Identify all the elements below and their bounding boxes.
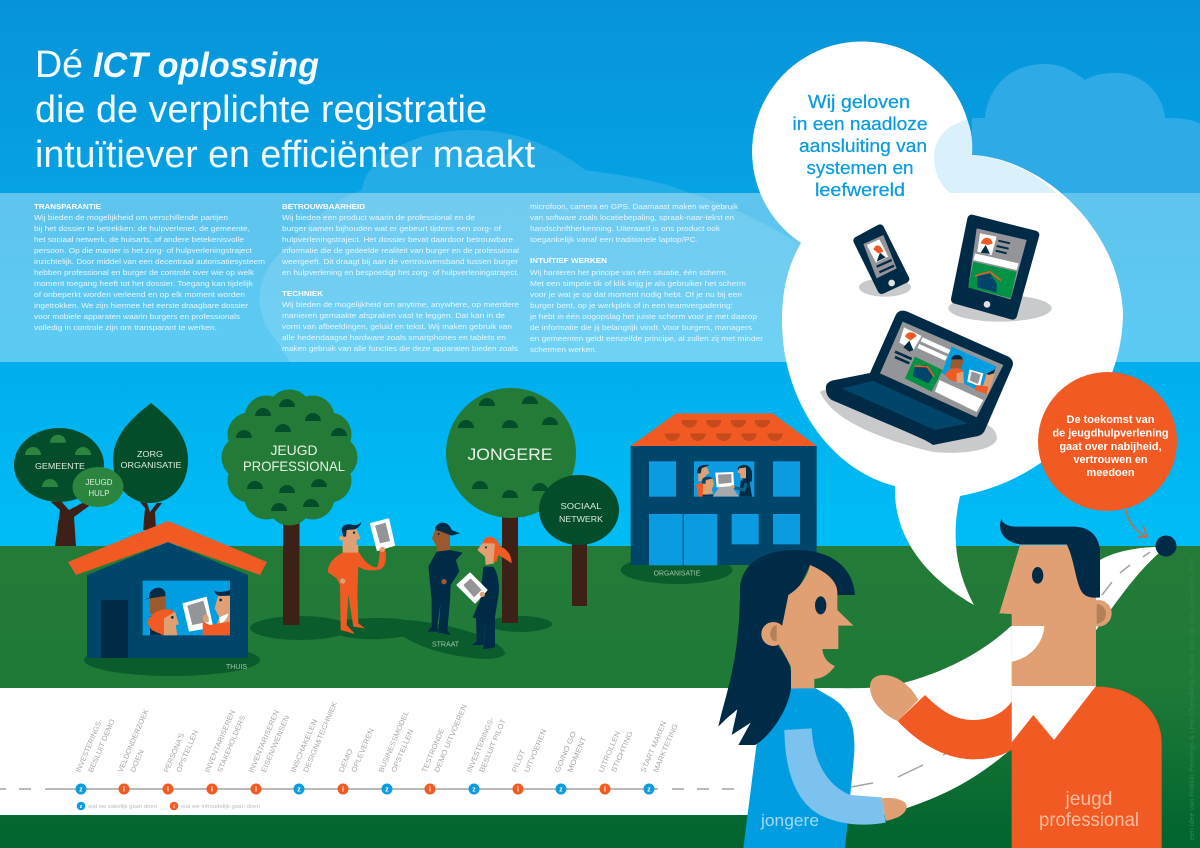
house: thuis: THUIS [226,664,247,671]
text block: techniek: maken gebruik van alle functies die deze apparaten bieden zoals [282,344,518,353]
tree: zorg organisatie: ORGANISATIE [120,460,182,470]
text block: betrouwbaarheid: informatie die de gedeelde realiteit van burger en de professional [282,246,519,255]
timeline milestones: z [79,786,83,794]
label: jeugd professional: professional [1039,810,1139,831]
timeline labels [74,696,680,778]
tree: gemeente [14,428,104,546]
timeline milestones: i [167,786,169,794]
text block: intuitief werken: Met een simpele tik of klik krijg je als gebruiker het scherm [530,279,746,288]
timeline labels: UITROLLEN [597,730,622,774]
text block: transparantie: volledig in controle zijn om transparant te werken. [34,323,217,332]
tree: gemeente: GEMEENTE [35,461,85,471]
text block: transparantie: bij het dossier te betrekken: de hulpverlener, de gemeente, [34,224,250,233]
bubble heading: leefwereld [815,179,905,200]
text block: techniek: manieren gemaakte afspraken vast te leggen. Dat kan in de [282,311,505,320]
arrow from callout to destination dot [1126,510,1147,537]
text block: betrouwbaarheid: Wij bieden een product waarin de professional en de [282,213,475,222]
title: intuïtiever en efficiënter maakt [35,134,535,176]
location label: straat: STRAAT [432,642,460,649]
timeline milestones: i [342,786,344,794]
tree: sociaal netwerk: NETWERK [559,514,603,524]
timeline labels: VELDONDERZOEK [116,707,150,774]
timeline milestones: z [385,786,389,794]
location label: organisatie: ORGANISATIE [654,570,701,577]
text block: transparantie: TRANSPARANTIE [34,202,101,211]
building: organisatie [621,413,817,584]
timeline labels: DEMO UITVOEREN [432,703,469,774]
timeline line [0,552,1150,789]
text block: techniek: Wij bieden de mogelijkheid om anytime, anywhere, op meerdere [282,300,519,309]
tree: jongere [446,388,576,632]
bubble heading [792,91,928,200]
timeline milestones: z [647,786,651,794]
text block: intuitief werken: Wij hanteren het principe van één situatie, één scherm. [530,268,728,277]
timeline labels: OPSTELLEN [174,729,200,774]
text block: transparantie [34,202,265,332]
speech bubble [752,42,1123,605]
title: die de verplichte registratie [35,89,487,131]
title [35,44,535,176]
timeline labels: STAKEHOLDERS [215,714,247,774]
label: jongere: jongere [760,811,819,830]
tree: jongere: JONGERE [468,445,552,464]
timeline milestones: i [211,786,213,794]
timeline labels: INVENTARISEREN [247,709,281,774]
text block: transparantie: hebben professional en burger de controle over wie op welk [34,268,254,277]
orange callout: De toekomst van [1066,414,1155,426]
timeline labels: INSCHAKELEN [289,718,319,774]
timeline milestones: i [429,786,431,794]
tree: zorg organisatie: ZORG [137,449,163,459]
text block: intuitief werken: burger bent, op je werkplek of in een teamvergadering: [530,301,733,310]
timeline milestones: i [255,786,257,794]
text block: transparantie: of onbeperkt worden verleend en op elk moment worden [34,290,245,299]
timeline labels: START MAKEN [639,720,668,774]
window with colleagues [696,465,752,497]
credit line: een idee van Robbin Pennings & Leon Chevalking, visuals: Iris van Sen, november 2016 [1189,558,1196,840]
person: professional with tablet [328,519,394,634]
grass [0,546,1200,848]
text block: transparantie: ingetrokken. We zijn hiermee het eerste draagbare dossier [34,301,249,310]
tree: jeugd professional [222,390,358,640]
timeline labels: PERSONA'S [162,731,186,774]
text block: transparantie: persoon. Op die manier is het zorg- of hulpverleningstraject [34,246,253,255]
timeline milestones: z [297,786,301,794]
text block: betrouwbaarheid: burger samen bijhouden wat er gebeurt tijdens een zorg- of [282,224,502,233]
destination dot [1156,536,1176,556]
tree: jeugd hulp: HULP [88,488,110,498]
timeline labels: DOEN [128,748,146,774]
text block: intuitief werken: en gemeenten geldt eenzelfde principe, al zullen zij met minder [530,334,764,343]
timeline legend: i [173,804,175,810]
icon: phone [857,228,911,297]
icon: laptop [820,311,1013,453]
orange callout: gaat over nabijheid, [1060,441,1162,453]
text block: transparantie: moment toegang heeft tot het dossier. Toegang kan tijdelijk [34,279,253,288]
tree: zorg organisatie [113,403,188,530]
cloud: pale overlap on bubble [934,120,1056,193]
cloud: left behind panel [260,130,801,362]
timeline labels: PILOT [510,748,527,774]
timeline milestones: i [123,786,125,794]
text block: betrouwbaarheid: BETROUWBAARHEID [282,202,366,211]
timeline labels: MOMENT [565,735,589,774]
timeline legend: wat we inhoudelijk gaan doen [180,804,260,810]
text block: intuitief werken: je hebt in één oogopslag het juiste scherm voor je met daarop [529,312,757,321]
text block: techniek: alle hedendaagse hardware zoals smartphones en tablets en [282,333,506,342]
white road band [0,547,1160,815]
background sky [0,0,1200,548]
cloud: top right [972,64,1200,193]
tree: jeugd professional: PROFESSIONAL [243,458,345,474]
timeline labels: MARKTETING [651,722,680,774]
text block: techniek: van software zoals locatiebepaling, spraak-naar-tekst en [530,213,734,222]
house: thuis [68,521,267,676]
timeline labels: TESTRONDE [420,727,446,774]
text block: intuitief werken: voor je wat je op dat moment nodig hebt. Of je nu bij een [530,290,742,299]
timeline labels: DESIGN&TECHNIEK [301,700,339,774]
text block: transparantie: inzichtelijk. Door middel van een decentraal autorisatiesysteem [34,257,265,266]
timeline milestones: i [604,786,606,794]
label: jeugd professional [1039,789,1139,831]
text block: intuitief werken: INTUÏTIEF WERKEN [530,256,607,265]
text block: intuitief werken [529,256,764,354]
bubble heading: Wij geloven [808,91,910,112]
devices [820,219,1052,453]
bubble heading: in een naadloze [792,113,928,134]
label: jeugd professional: jeugd [1064,789,1112,810]
timeline labels: UITVOEREN [522,728,548,774]
people on the street [320,519,512,659]
tree: jeugd professional: JEUGD [270,442,318,458]
timeline labels: DEMO [337,747,355,774]
bubble heading: aansluiting van [799,135,927,156]
bubble heading: systemen en [806,157,914,178]
title: ICT oplossing [93,46,319,85]
orange callout: meedoen [1086,467,1135,479]
timeline milestones [76,784,654,794]
text block: transparantie: voor mobiele apparaten waarin burgers en professionals [34,312,240,321]
text block: techniek: handschriftherkenning. Uiteraard is ons product ook [530,224,720,233]
text block: transparantie: Wij bieden de mogelijkheid om verschillende partijen [34,213,228,222]
icon: tablet [948,219,1052,322]
timeline labels: BESLUIT PILOT [477,717,508,774]
timeline milestones: z [472,786,476,794]
text block: betrouwbaarheid: en hulpverlening en bespoedigt het zorg- of hulpverleningstraject. [282,268,519,277]
person: jongere [718,550,907,848]
window with family [143,581,230,635]
timeline labels: STICHTING [609,729,635,774]
text block: betrouwbaarheid [281,202,519,277]
text block: betrouwbaarheid: weergeeft. Dit draagt bij aan de vertrouwensband tussen burger [281,257,519,266]
text block: transparantie: het sociaal netwerk, de huisarts, of andere betekenisvolle [34,235,244,244]
text block: techniek: microfoon, camera en GPS. Daarnaast maken we gebruik [530,202,738,211]
timeline labels: BESLUIT DEMO [86,717,117,774]
timeline milestones: z [559,786,563,794]
text panel [0,193,1200,362]
orange callout [1038,372,1177,511]
text block: intuitief werken: schermen werken. [530,345,597,354]
timeline labels: INVESTERINGS- [74,717,104,774]
timeline legend: z [80,804,83,810]
tree: jeugd hulp [72,467,124,507]
timeline labels: INVESTERINGS- [465,715,496,774]
tree: sociaal netwerk [539,475,619,606]
text block: techniek: vorm van afbeeldingen, geluid en tekst. Wij maken gebruik van [282,322,512,331]
text block: techniek [282,202,738,353]
person: jeugdprofessional [870,518,1162,848]
person: youth with cap [427,523,463,635]
text block: betrouwbaarheid: hulpverleningstraject. Het dossier bevat daardoor betrouwbare [282,235,513,244]
timeline labels: BUSINESSMODEL [377,710,411,774]
timeline labels: OPSTELLEN [389,728,415,774]
street shadow [320,618,505,659]
person: woman with tablet [457,537,512,649]
timeline labels: GO/NO GO [553,729,578,774]
tree: jeugd hulp: JEUGD [86,477,112,487]
orange callout: de jeugdhulpverlening [1052,428,1168,440]
timeline labels: EISEN/WENSEN [259,714,291,774]
title: Dé [35,44,83,86]
timeline milestones: i [517,786,519,794]
tree: sociaal netwerk: SOCIAAL [560,501,602,511]
text block: intuitief werken: de informatie die jij belangrijk vindt. Voor burgers, managers [530,323,752,332]
text block: techniek: toegankelijk vanaf een traditionele laptop/PC. [530,235,698,244]
timeline labels: INVENTARISEREN [203,709,237,774]
timeline legend [77,802,260,810]
text block: techniek: TECHNIEK [282,289,324,298]
orange callout: vertrouwen en [1074,454,1148,466]
timeline labels: OPLEVEREN [349,727,376,774]
timeline legend: wat we zakelijk gaan doen [87,804,157,810]
